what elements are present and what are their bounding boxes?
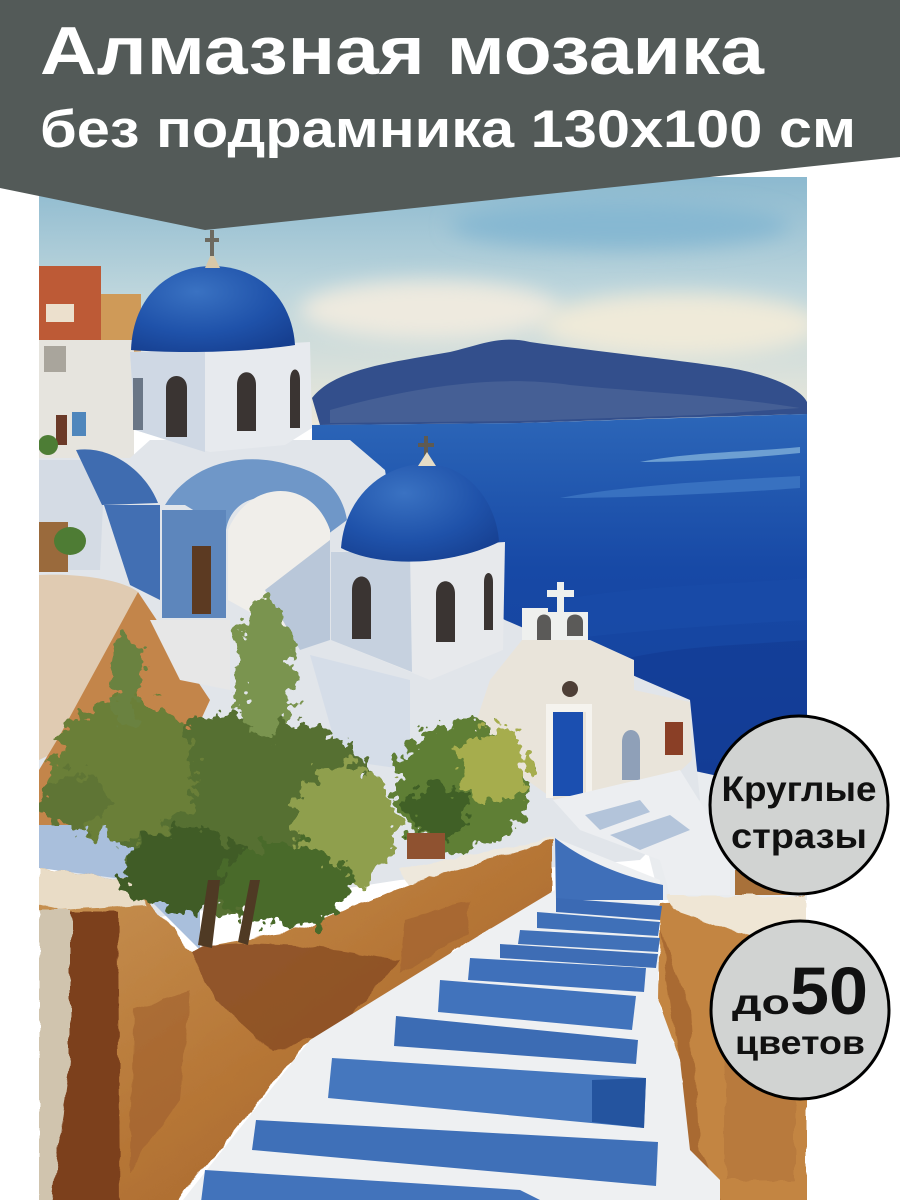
left retaining wall [39,838,552,1200]
subtitle: без подрамника 130х100 см [40,100,856,159]
tree trunks [198,880,260,948]
dome [131,266,295,352]
olive tree small [394,721,531,849]
rocks right of chapel [640,770,807,900]
lower church [331,436,505,680]
badge: round rhinestones: стразы [731,817,867,856]
small chapel [470,582,692,800]
title: Алмазная мозаика [40,13,765,89]
sky [39,177,820,427]
white buildings far left [38,266,141,465]
badge: up to 50 colours [711,921,889,1099]
badge: up to 50 colours: цветов [735,1024,865,1061]
badge: up to 50 colours: 50 [790,954,868,1029]
distant island [312,340,807,425]
white terrace mass [39,440,700,950]
right retaining wall [658,895,807,1200]
header banner [0,0,900,230]
upper church [130,230,312,452]
flower pot [407,833,445,859]
badge: round rhinestones: Круглые [722,770,876,809]
badge: up to 50 colours: до [732,983,790,1022]
panel: painting of Santorini [38,177,820,1200]
badge: round rhinestones [710,716,888,894]
olive tree large [41,600,397,927]
staircase [175,770,730,1200]
sea [312,414,807,800]
